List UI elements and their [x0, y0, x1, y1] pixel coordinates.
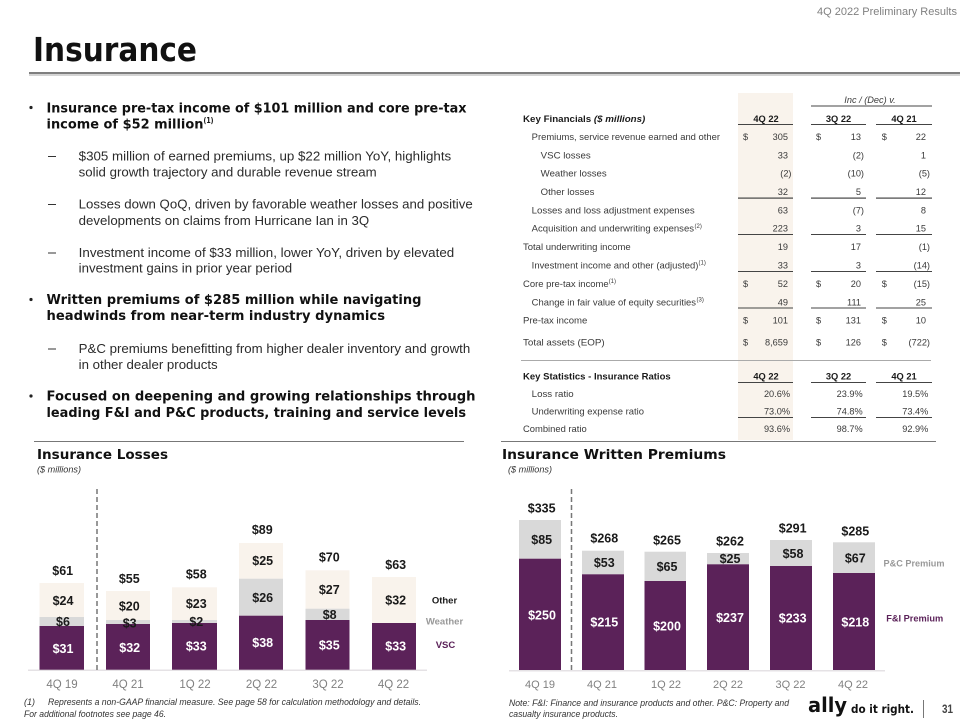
row: losses and LAE: (7) [853, 205, 864, 215]
bar: 4Q 22 [372, 558, 416, 691]
sub-bullet: investment income: Investment income of $33 million, lower YoY, driven by elevated [79, 245, 454, 260]
row: total underwriting income [523, 242, 930, 252]
row: investment income: (14) [914, 261, 930, 271]
row: VSC losses: 1 [921, 150, 926, 160]
row: weather losses: (10) [848, 169, 864, 179]
bar: 3Q 22: 3Q 22 [312, 679, 344, 691]
bar: 3Q 22: $291 [779, 522, 807, 536]
bar: 2Q 22 [239, 523, 283, 691]
row: pre-tax income: $ [882, 315, 887, 325]
row: key financials header: 4Q 22 [753, 114, 779, 124]
row: equity securities: (3) [696, 298, 704, 304]
row: investment income: Investment income and other (adjusted) [532, 261, 698, 271]
row: underwriting expense ratio: 73.0% [764, 407, 790, 417]
row: underwriting expense ratio: 73.4% [902, 407, 928, 417]
bar: 2Q 22: 2Q 22 [246, 679, 277, 691]
row: VSC losses: 33 [778, 150, 788, 160]
row: key statistics header: 3Q 22 [826, 372, 851, 382]
row: pre-tax income: 131 [846, 315, 861, 325]
logo: ally do it right: do it right. [851, 702, 914, 716]
row: acquisition expenses: Acquisition and underwriting expenses [532, 224, 694, 234]
sub-bullet: earned premiums: $305 million of earned premiums, up $22 million YoY, highlights [79, 149, 452, 164]
sub-bullet: investment income: investment gains in prior year period [79, 261, 292, 276]
row: key financials header: 4Q 21 [891, 114, 917, 124]
row: investment income: (1) [698, 260, 706, 266]
bullet: pre-tax income [29, 101, 467, 132]
bar: 4Q 19: $61 [52, 564, 73, 578]
row: premiums: $ [882, 132, 887, 142]
bullet: F&I relationships: leading F&I and P&C products, training and service levels [46, 406, 466, 421]
bar: 4Q 21 [106, 572, 150, 691]
bar: 3Q 22: $58 [783, 547, 803, 561]
bar: 4Q 22: $285 [841, 524, 869, 538]
sub-bullet: losses down: developments on claims from Hurricane Ian in 3Q [79, 213, 369, 228]
legend: premiums [884, 558, 944, 624]
row: equity securities [532, 297, 926, 307]
bar: 1Q 22: 1Q 22 [651, 679, 681, 691]
row: premiums: Premiums, service revenue earned and other [532, 132, 720, 142]
row: acquisition expenses: 223 [773, 224, 788, 234]
row: total assets: (722) [909, 338, 930, 348]
bullet: written premiums [29, 293, 422, 324]
bar: 2Q 22: $237 [716, 611, 744, 625]
bar: 1Q 22: $2 [189, 615, 203, 629]
row: loss ratio [532, 389, 928, 399]
row: acquisition expenses: 15 [916, 224, 926, 234]
bullet: F&I relationships: Focused on deepening and growing relationships through [46, 390, 476, 405]
bar: 4Q 21: $215 [590, 616, 618, 630]
bar: 2Q 22: $25 [720, 552, 740, 566]
table: key financials and ratios [521, 93, 932, 440]
sub-bullet: P&C premiums: in other dealer products [79, 357, 218, 372]
legend: premiums: P&C Premium [884, 558, 944, 570]
bar: 1Q 22: $23 [186, 597, 207, 611]
row: equity securities: Change in fair value of equity securities [532, 297, 696, 307]
bar: 4Q 22: 4Q 22 [838, 679, 868, 691]
row: VSC losses: VSC losses [541, 150, 591, 160]
row: underwriting expense ratio: Underwriting expense ratio [532, 407, 644, 417]
bar: 4Q 22: $63 [385, 558, 406, 572]
footnote: left [24, 697, 421, 719]
footnote: left: Represents a non-GAAP financial measure. See page 58 for calculation methodology and details. [48, 697, 421, 707]
bar: 4Q 22: $32 [385, 594, 406, 608]
row: premiums [532, 132, 926, 142]
chart: insurance losses stacked bars [28, 489, 463, 691]
row: investment income: 33 [778, 261, 788, 271]
row: pre-tax income [523, 315, 926, 325]
row: investment income: 3 [856, 261, 861, 271]
bar: 2Q 22: $25 [252, 554, 273, 568]
bar: 4Q 21: $55 [119, 572, 140, 586]
row: total assets: 126 [846, 338, 861, 348]
sub-bullet: P&C premiums: P&C premiums benefitting from higher dealer inventory and growth [79, 341, 470, 356]
bar: 1Q 22: $58 [186, 568, 207, 582]
row: weather losses [541, 169, 930, 179]
bullet: pre-tax income: income of $52 million [46, 117, 204, 132]
row: equity securities: 49 [778, 297, 788, 307]
bar: 2Q 22: $262 [716, 534, 744, 548]
footnote: left: For additional footnotes see page 46. [24, 709, 166, 719]
legend: premiums: F&I Premium [886, 614, 943, 624]
footnote: left: (1) [24, 697, 35, 707]
row: pre-tax income: $ [816, 315, 821, 325]
legend: losses [426, 596, 463, 651]
bar: 4Q 21: 4Q 21 [112, 679, 144, 691]
row: weather losses: (2) [780, 169, 792, 179]
bar: 4Q 21 [582, 531, 624, 691]
bar: 4Q 19 [519, 502, 561, 691]
panel: key takeaways text [29, 101, 476, 421]
unit note: losses: ($ millions) [37, 465, 81, 475]
sub-bullet: earned premiums: solid growth trajectory and durable revenue stream [79, 165, 377, 180]
row: total underwriting income: (1) [919, 242, 930, 252]
bar: 4Q 22 [833, 524, 875, 691]
row: core pre-tax income: 20 [851, 279, 861, 289]
bar: 2Q 22: $38 [252, 636, 273, 650]
row: core pre-tax income: 52 [778, 279, 788, 289]
page number: 31 [942, 704, 954, 716]
heading: insurance written premiums: Insurance Written Premiums [502, 447, 726, 463]
row: combined ratio: 93.6% [764, 424, 790, 434]
row: key financials header: Key Financials ($ millions) [523, 114, 645, 124]
row: pre-tax income: 101 [773, 315, 788, 325]
row: other losses: 5 [856, 187, 861, 197]
row: loss ratio: 20.6% [764, 389, 790, 399]
bar: 2Q 22: $89 [252, 523, 273, 537]
bar: 4Q 21: $32 [119, 641, 140, 655]
bar: 3Q 22: $70 [319, 551, 340, 565]
bar: 4Q 19: $335 [528, 502, 556, 516]
row: total assets: $ [743, 338, 748, 348]
row: core pre-tax income: $ [882, 279, 887, 289]
row: pre-tax income: $ [743, 315, 748, 325]
bullet: pre-tax income: Insurance pre-tax income of $101 million and core pre-tax [46, 101, 467, 116]
row: combined ratio [523, 424, 928, 434]
bar: 4Q 22: $218 [841, 615, 869, 629]
bar: 4Q 21: $53 [594, 556, 615, 570]
row: combined ratio: 98.7% [837, 424, 863, 434]
row: premiums: $ [743, 132, 748, 142]
row: total underwriting income: 17 [851, 242, 861, 252]
footnote: right [509, 698, 790, 719]
bar: 4Q 21: $3 [123, 616, 137, 630]
row: other losses: 12 [916, 187, 926, 197]
row: pre-tax income: Pre-tax income [523, 315, 587, 325]
row: premiums: 305 [773, 132, 788, 142]
row: premiums: 13 [851, 132, 861, 142]
bar: 4Q 19: $6 [56, 615, 70, 629]
bar: 4Q 19: 4Q 19 [525, 679, 555, 691]
bar: 4Q 22: $67 [845, 552, 866, 566]
heading: insurance losses: Insurance Losses [37, 447, 168, 463]
sub-bullet: P&C premiums [48, 341, 470, 372]
bar: 4Q 22: $33 [385, 640, 406, 654]
bar: 3Q 22: $35 [319, 639, 340, 653]
row: other losses: 32 [778, 187, 788, 197]
row: equity securities: 25 [916, 297, 926, 307]
row: underwriting expense ratio [532, 407, 928, 417]
bar: 4Q 21: $20 [119, 599, 140, 613]
row: combined ratio: 92.9% [902, 424, 928, 434]
row: total assets: 8,659 [765, 338, 788, 348]
row: VSC losses [541, 150, 926, 160]
bar: 2Q 22: $26 [252, 591, 273, 605]
bar: 1Q 22: $200 [653, 620, 681, 634]
legend: losses: Other [432, 596, 457, 606]
row: loss ratio: Loss ratio [532, 389, 574, 399]
sub-bullet: losses down [48, 197, 473, 228]
bar: 3Q 22: 3Q 22 [776, 679, 805, 691]
row: loss ratio: 23.9% [837, 389, 863, 399]
bar: 4Q 19: 4Q 19 [46, 679, 78, 691]
bar: 4Q 21: $268 [590, 531, 618, 545]
bullet: written premiums: Written premiums of $285 million while navigating [46, 293, 422, 308]
bar: 4Q 19: $85 [531, 533, 552, 547]
row: acquisition expenses: (2) [694, 224, 702, 230]
sub-bullet: earned premiums [48, 149, 452, 180]
unit note: premiums: ($ millions) [508, 465, 552, 475]
footnote: right: Note: F&I: Finance and insurance products and other. P&C: Property and [509, 698, 790, 708]
bar: 4Q 19 [40, 564, 84, 691]
row: other losses [541, 187, 926, 197]
bar: 1Q 22: $65 [657, 560, 677, 574]
bar: 1Q 22: $33 [186, 640, 207, 654]
row: combined ratio: Combined ratio [523, 424, 587, 434]
bar: 4Q 22: 4Q 22 [378, 679, 409, 691]
bar: 3Q 22: $233 [779, 612, 807, 626]
row: weather losses: (5) [919, 169, 930, 179]
row: acquisition expenses: 3 [856, 224, 861, 234]
row: core pre-tax income: (1) [609, 279, 616, 285]
chart: insurance written premiums stacked bars [509, 489, 944, 691]
row: losses and LAE: 8 [921, 205, 926, 215]
bar: 4Q 21: 4Q 21 [587, 679, 617, 691]
row: acquisition expenses [532, 224, 926, 234]
row: total underwriting income: 19 [778, 242, 788, 252]
bar: 3Q 22 [306, 551, 350, 691]
legend: losses: VSC [436, 640, 455, 651]
row: core pre-tax income: Core pre-tax income [523, 279, 609, 289]
row: investment income [532, 260, 930, 271]
bar: 3Q 22: $8 [323, 608, 337, 622]
bar: 2Q 22: 2Q 22 [713, 679, 743, 691]
row: other losses: Other losses [541, 187, 595, 197]
row: total underwriting income: Total underwriting income [523, 242, 631, 252]
sub-bullet: losses down: Losses down QoQ, driven by favorable weather losses and positive [79, 197, 473, 212]
bar: 4Q 19: $250 [528, 608, 556, 622]
row: total assets: $ [882, 338, 887, 348]
row: core pre-tax income: (15) [914, 279, 930, 289]
row: key statistics header [523, 372, 917, 382]
row: loss ratio: 19.5% [902, 389, 928, 399]
bar: 4Q 19: $24 [53, 594, 73, 608]
row: total assets [523, 338, 930, 348]
row: premiums: $ [816, 132, 821, 142]
row: key statistics header: Key Statistics - Insurance Ratios [523, 372, 671, 382]
row: losses and LAE: 63 [778, 205, 788, 215]
bullet: written premiums: headwinds from near-term industry dynamics [46, 309, 385, 324]
title: Insurance [33, 30, 197, 69]
bar: 3Q 22: $27 [319, 583, 340, 597]
row: core pre-tax income: $ [743, 279, 748, 289]
row: key financials header [523, 114, 917, 124]
row: key statistics header: 4Q 21 [891, 372, 917, 382]
bar: 2Q 22 [707, 534, 749, 691]
page header: report name: 4Q 2022 Preliminary Results [817, 6, 957, 18]
footnote: right: casualty insurance products. [509, 709, 618, 719]
row: key financials header: 3Q 22 [826, 114, 851, 124]
bar: 1Q 22: 1Q 22 [179, 679, 211, 691]
legend: losses: Weather [426, 616, 463, 628]
bar: 1Q 22 [172, 568, 217, 691]
logo: ally do it right [808, 693, 914, 717]
row: premiums: 22 [916, 132, 926, 142]
row: core pre-tax income: $ [816, 279, 821, 289]
table header: comparison: Inc / (Dec) v. [844, 95, 896, 105]
row: core pre-tax income [523, 279, 930, 289]
row: weather losses: Weather losses [541, 169, 607, 179]
row: total assets: Total assets (EOP) [523, 338, 605, 348]
row: VSC losses: (2) [853, 150, 864, 160]
bar: 4Q 19: $31 [53, 642, 73, 656]
sub-bullet: investment income [48, 245, 454, 276]
bar: 3Q 22 [770, 522, 812, 691]
logo: ally do it right: ally [808, 693, 847, 717]
row: total assets: $ [816, 338, 821, 348]
row: losses and LAE: Losses and loss adjustment expenses [532, 205, 695, 215]
bar: 1Q 22 [644, 533, 686, 691]
bar: 1Q 22: $265 [653, 533, 681, 547]
row: losses and LAE [532, 205, 926, 215]
row: pre-tax income: 10 [916, 315, 926, 325]
row: key statistics header: 4Q 22 [753, 372, 779, 382]
row: underwriting expense ratio: 74.8% [837, 407, 863, 417]
bullet: F&I relationships [29, 390, 476, 421]
bullet: pre-tax income: (1) [204, 116, 214, 125]
row: equity securities: 111 [847, 297, 861, 307]
